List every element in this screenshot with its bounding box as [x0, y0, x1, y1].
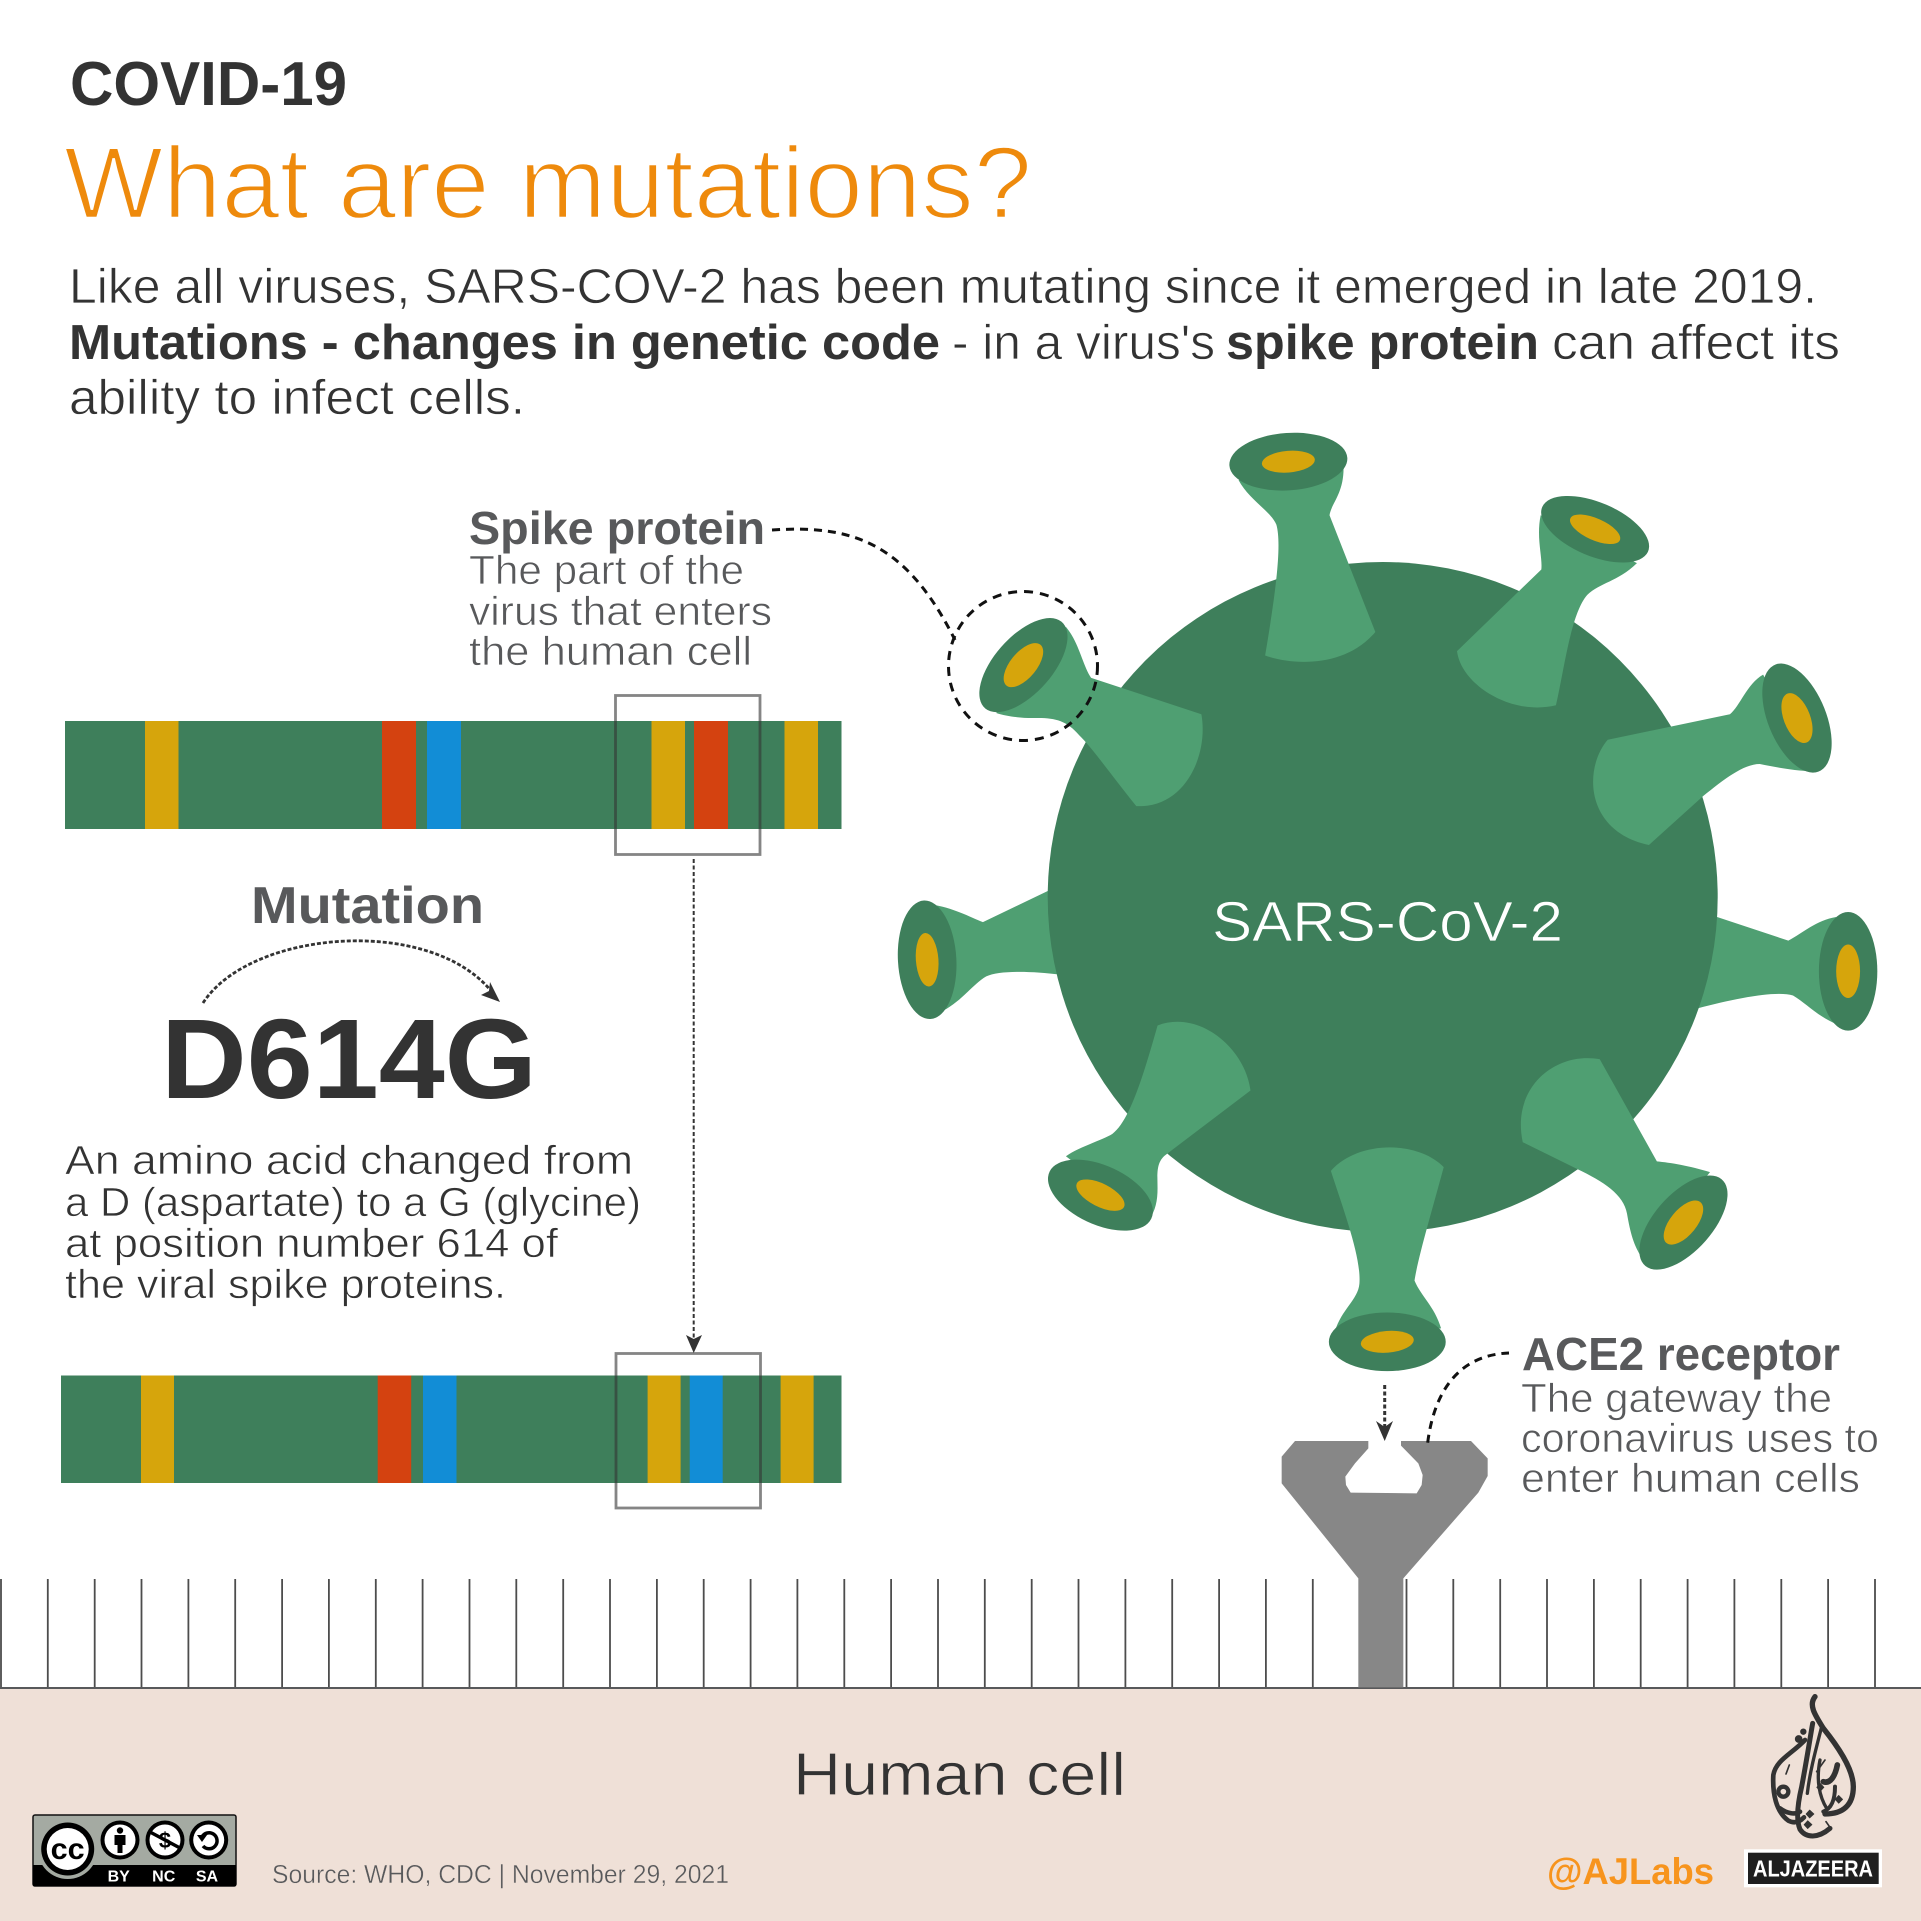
- mutation description: the viral spike proteins.: [65, 1261, 506, 1307]
- icon: Al Jazeera calligraphy logo: [1773, 1697, 1853, 1836]
- icon: creative commons badge: NC: [152, 1868, 176, 1886]
- bottom highlight box: [616, 1354, 760, 1508]
- spike caps: [895, 429, 1877, 1371]
- cell membrane lines: [1, 1579, 1875, 1688]
- icon: creative commons badge: SA: [196, 1868, 219, 1886]
- mutation description: An amino acid changed from: [65, 1137, 633, 1183]
- label: spike protein: [469, 502, 772, 674]
- arrow: curved mutation arrow: [203, 941, 500, 1003]
- handle: AJLabs: @AJLabs: [1547, 1851, 1714, 1892]
- dashed circle around spike: [948, 592, 1098, 740]
- mutation code: D614G: D614G: [161, 996, 537, 1122]
- virus: SARS-CoV-2: [895, 429, 1877, 1371]
- top highlight box: [616, 696, 760, 854]
- intro paragraph: ability to infect cells.: [69, 371, 525, 425]
- kicker: COVID-19: COVID-19: [70, 50, 347, 119]
- icon: creative commons badge: $: [159, 1828, 171, 1853]
- human cell band: [0, 1688, 1921, 1921]
- membrane base line: [0, 1687, 1921, 1689]
- intro paragraph: Like all viruses, SARS-COV-2 has been mutating since it emerged in late 2019.: [69, 260, 1817, 314]
- icon: creative commons badge: [33, 1815, 236, 1886]
- spike: lower left: [1066, 1022, 1251, 1220]
- icon: Al Jazeera wordmark: [1744, 1849, 1882, 1887]
- label: ACE2 receptor: [1521, 1328, 1879, 1501]
- dashed leader: spike protein: [772, 529, 955, 640]
- icon: ACE2 receptor: [1282, 1441, 1488, 1687]
- spike: lower right: [1521, 1058, 1710, 1258]
- intro paragraph: spike protein: [1226, 316, 1539, 370]
- intro paragraph: - in a virus's: [952, 316, 1215, 370]
- spike gold tips: [914, 449, 1860, 1355]
- label: ACE2 receptor: coronavirus uses to: [1521, 1415, 1879, 1461]
- spike: right base: [1698, 916, 1839, 1025]
- label: ACE2 receptor: enter human cells: [1521, 1455, 1860, 1501]
- icon: creative commons badge: cc: [51, 1833, 85, 1866]
- spike: right upper: [1593, 675, 1816, 845]
- label: ACE2 receptor: The gateway the: [1521, 1375, 1832, 1421]
- spike: left base: [930, 890, 1059, 1011]
- label: spike protein: Spike protein: [469, 502, 765, 554]
- arrow: top box to bottom box: [686, 859, 702, 1353]
- mutation description: a D (aspartate) to a G (glycine): [65, 1179, 641, 1225]
- spike: upper left: [996, 627, 1203, 806]
- icon: Al Jazeera wordmark: ALJAZEERA: [1753, 1856, 1873, 1882]
- title: What are mutations?: [64, 126, 1032, 240]
- label: spike protein: the human cell: [469, 628, 752, 674]
- icon: creative commons badge: BY: [108, 1868, 130, 1886]
- bottom spike sequence bar: [61, 1376, 842, 1483]
- intro paragraph: Mutations - changes in genetic code: [69, 316, 940, 370]
- intro paragraph: [69, 260, 1840, 425]
- source line: Source: WHO, CDC | November 29, 2021: [272, 1859, 729, 1889]
- spike: bottom: [1331, 1147, 1444, 1332]
- heading: mutation: Mutation: [251, 877, 484, 935]
- mutation description: [65, 1137, 641, 1307]
- spike: top: [1239, 464, 1375, 662]
- label: ACE2 receptor: ACE2 receptor: [1522, 1328, 1840, 1380]
- intro paragraph: can affect its: [1552, 316, 1840, 370]
- virus name: SARS-CoV-2: [1212, 890, 1563, 954]
- mutation description: at position number 614 of: [65, 1220, 559, 1266]
- label: human cell: Human cell: [793, 1741, 1126, 1808]
- label: spike protein: The part of the: [469, 547, 744, 593]
- arrow: spike to receptor: [1376, 1385, 1393, 1441]
- top spike sequence bar: [65, 721, 842, 829]
- virus body: [1048, 562, 1718, 1232]
- label: spike protein: virus that enters: [469, 588, 772, 634]
- spike: upper right: [1457, 515, 1637, 707]
- dashed leader: ACE2 receptor: [1428, 1353, 1509, 1443]
